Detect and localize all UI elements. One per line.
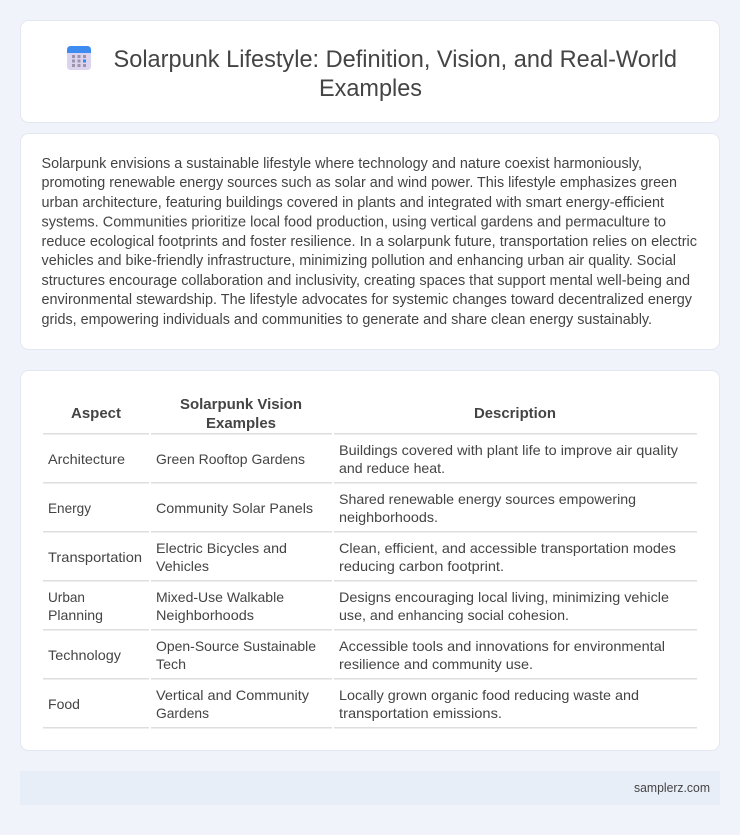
text block: solarpunk description: Solarpunk envisions a sustainable lifestyle where technology and nature coexist harmoniously, <box>42 156 642 172</box>
text block: solarpunk description: environmental stewardship. The lifestyle advocates for systemic changes toward decentralized energy <box>42 292 693 308</box>
panel: introduction text <box>20 134 720 350</box>
table row: Transportation: Transportation <box>48 549 142 565</box>
table header row: Examples <box>206 415 276 432</box>
table row: Urban Planning <box>48 589 669 623</box>
table row: Technology: Accessible tools and innovations for environmental <box>339 638 665 654</box>
table row: Technology <box>48 638 665 672</box>
table row: Technology: Technology <box>48 647 121 663</box>
text block: solarpunk description: vehicles and bike-friendly infrastructure, minimizing pollution and enhancing urban air quality. Social <box>42 253 676 269</box>
text block: solarpunk description: grids, empowering individuals and communities to generate and share clean energy sustainably. <box>42 312 652 328</box>
table row: Architecture: Architecture <box>48 451 125 467</box>
table row: Architecture: Green Rooftop Gardens <box>156 451 305 467</box>
text block: solarpunk description: systems. Communities prioritize local food production, using vertical gardens and permaculture to <box>42 214 666 230</box>
table row: Urban Planning: Mixed-Use Walkable <box>156 589 284 605</box>
table row: Transportation: Vehicles <box>156 558 209 574</box>
title <box>114 46 677 102</box>
table row: Architecture: and reduce heat. <box>339 460 445 476</box>
table row: Energy: Shared renewable energy sources empowering <box>339 491 636 507</box>
text block: solarpunk description: reduce ecological footprints and foster resilience. In a solarpunk future, transportation relies on electric <box>42 234 697 250</box>
table row: Transportation <box>48 540 676 574</box>
table header row: Aspect <box>71 405 121 422</box>
table row: Architecture: Buildings covered with plant life to improve air quality <box>339 442 678 458</box>
table row: Transportation: Clean, efficient, and accessible transportation modes <box>339 540 676 556</box>
table row: Technology: resilience and community use. <box>339 656 533 672</box>
footer source text: samplerz.com <box>634 781 710 795</box>
table row: Energy <box>48 491 636 525</box>
table row: Urban Planning: use, and enhancing social cohesion. <box>339 607 569 623</box>
title: Examples <box>319 75 422 102</box>
table row: Energy: Energy <box>48 500 91 516</box>
table header row <box>71 396 556 432</box>
table row: Technology: Tech <box>156 656 186 672</box>
table row: Food: Food <box>48 696 80 712</box>
title: Solarpunk Lifestyle: Definition, Vision, and Real-World <box>114 46 677 73</box>
table row: Food: Locally grown organic food reducing waste and <box>339 687 639 703</box>
table row: Food: Gardens <box>156 705 209 721</box>
table row: Urban Planning: Neighborhoods <box>156 607 254 623</box>
icon: calendar <box>67 46 91 70</box>
footer bar <box>20 771 720 805</box>
table row: Technology: Open-Source Sustainable <box>156 638 316 654</box>
text block: solarpunk description: urban architecture, featuring buildings covered in plants and integrated with smart energy-efficient <box>42 195 664 211</box>
table row: Energy: neighborhoods. <box>339 509 438 525</box>
table row: Energy: Community Solar Panels <box>156 500 313 516</box>
table row: Food: transportation emissions. <box>339 705 502 721</box>
text block: solarpunk description: promoting renewable energy sources such as solar and wind power. This lifestyle emphasizes green <box>42 175 677 191</box>
text block: solarpunk description <box>42 156 697 328</box>
text block: solarpunk description: structures encourage collaboration and inclusivity, creating spaces that support mental well-being and <box>42 273 690 289</box>
table row: Urban Planning: Urban <box>48 589 85 605</box>
table row: Architecture <box>48 442 678 476</box>
table row: Food <box>48 687 639 721</box>
table row: Urban Planning: Planning <box>48 607 103 623</box>
table row: Food: Vertical and Community <box>156 687 309 703</box>
panel: title header <box>20 20 720 122</box>
table row: Urban Planning: Designs encouraging local living, minimizing vehicle <box>339 589 669 605</box>
panel: comparison table <box>20 370 720 750</box>
table row: Transportation: Electric Bicycles and <box>156 540 287 556</box>
table header row: Solarpunk Vision <box>180 396 302 413</box>
table header row: Description <box>474 405 556 422</box>
table row: Transportation: reducing carbon footprint. <box>339 558 504 574</box>
